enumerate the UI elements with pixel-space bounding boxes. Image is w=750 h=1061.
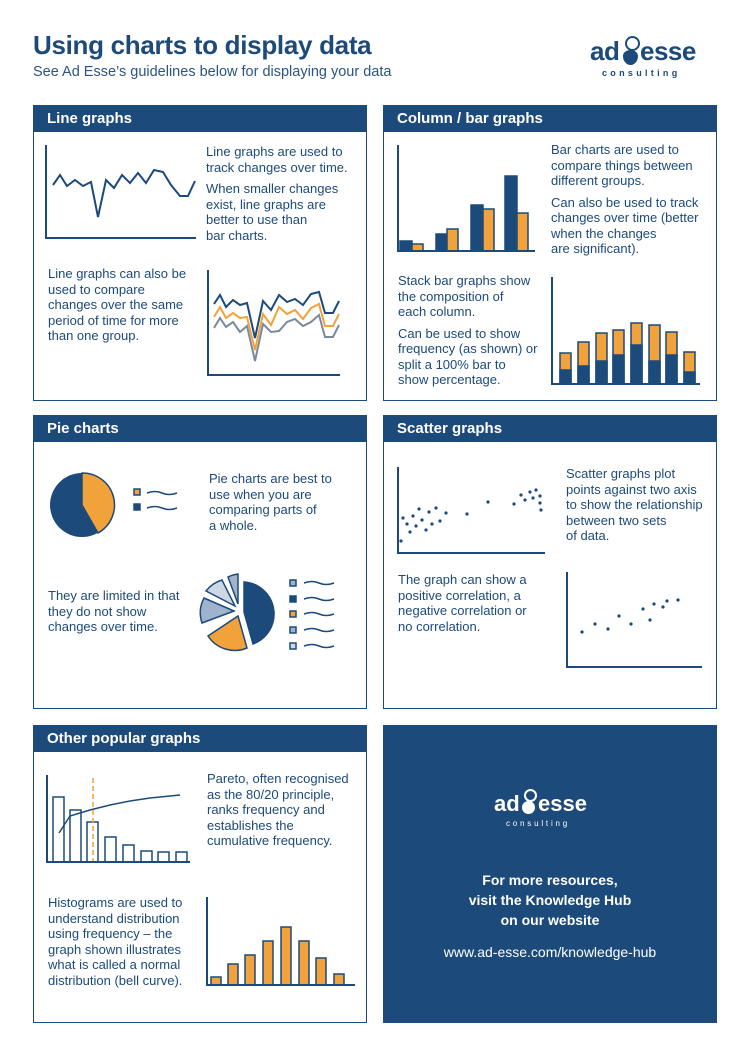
text: histogram: Histograms are used to [48, 895, 182, 910]
text: scatter 2: The graph can show a [398, 572, 527, 587]
logo: white: ad [494, 791, 520, 816]
text: histogram: using frequency – the [48, 926, 172, 941]
text: bar 2 [398, 273, 538, 387]
text: pie 1: use when you are [209, 486, 312, 502]
panel: resources [383, 725, 717, 1023]
panel: line graphs: Line graphs [47, 110, 132, 127]
logo: esse [640, 36, 696, 66]
text: line graphs 1: bar charts. [206, 228, 267, 242]
text: bar 2: Can be used to show [398, 326, 520, 340]
text: pie 2: they do not show [48, 604, 146, 618]
text: scatter 2: no correlation. [398, 618, 480, 634]
text: bar 1: are significant). [551, 241, 639, 256]
logo: ad [590, 36, 619, 66]
text: line graphs 2 [48, 266, 186, 343]
text: bar 1: when the changes [551, 226, 657, 240]
text: histogram: distribution (bell curve). [48, 972, 182, 988]
text: bar 1: different groups. [551, 173, 645, 188]
text: line graphs 2: period of time for more [48, 312, 179, 328]
logo: white: consulting [506, 819, 570, 828]
text: resources: on our website [501, 912, 599, 928]
logo [590, 36, 696, 78]
text: scatter 1: between two sets [566, 512, 666, 528]
panel: column bar graphs: Column / bar graphs [397, 110, 543, 127]
text: pie 2: changes over time. [48, 619, 158, 634]
panel: other popular graphs: Other popular graphs [47, 730, 200, 747]
text: scatter 2 [398, 572, 527, 634]
text: pie 2 [48, 588, 180, 634]
panel: other popular graphs [33, 725, 367, 1023]
text: pareto: ranks frequency and [207, 802, 325, 817]
logo: consulting [602, 68, 680, 78]
text: scatter 1: Scatter graphs plot [566, 466, 675, 481]
text: bar 2: Stack bar graphs show [398, 273, 530, 288]
text: pie 2: They are limited in that [48, 588, 180, 603]
text: bar 1: compare things between [551, 158, 693, 172]
text: scatter 1: to show the relationship [566, 497, 703, 512]
text: scatter 1: points against two axis [566, 482, 697, 496]
text: bar 1: Can also be used to track [551, 194, 698, 210]
text: bar 1 [551, 142, 698, 256]
panel: pie charts: Pie charts [47, 420, 119, 437]
panel: column bar graphs [383, 105, 717, 401]
text: bar 1: Bar charts are used to [551, 142, 679, 157]
logo: white [494, 789, 587, 828]
text: line graphs 1: better to use than [206, 212, 307, 227]
text: bar 2: frequency (as shown) or [398, 341, 537, 356]
text: line graphs 2: used to compare [48, 282, 145, 296]
text: line graphs 1: track changes over time. [206, 160, 348, 174]
text: pie 1: comparing parts of [209, 502, 317, 517]
panel: scatter graphs [383, 415, 717, 709]
text: line graphs 1: Line graphs are used to [206, 144, 343, 159]
subtitle: See Ad Esse’s guidelines below for displaying your data [33, 64, 391, 80]
text: line graphs 2: changes over the same [48, 297, 183, 312]
text: pareto [207, 771, 349, 848]
text: pie 1 [209, 471, 332, 532]
text: line graphs 1 [206, 144, 348, 242]
text: scatter 1: of data. [566, 528, 609, 543]
text: scatter 1 [566, 466, 703, 543]
text: bar 2: the composition of [398, 288, 504, 304]
text: pie 1: Pie charts are best to [209, 471, 332, 486]
text: histogram: understand distribution [48, 910, 180, 926]
panel: pie charts [33, 415, 367, 709]
text: bar 2: split a 100% bar to [398, 356, 506, 372]
text: scatter 2: negative correlation or [398, 603, 527, 618]
panel: line graphs [33, 105, 367, 401]
title: Using charts to display data [33, 30, 371, 60]
logo: white: esse [538, 791, 587, 816]
text: line graphs 1: exist, line graphs are [206, 196, 326, 212]
text: resources: For more resources, [482, 872, 618, 888]
text: bar 2: each column. [398, 304, 475, 319]
url: www.ad-esse.com/knowledge-hub [444, 944, 656, 960]
text: line graphs 1: When smaller changes [206, 181, 338, 196]
text: pareto: cumulative frequency. [207, 833, 332, 848]
text: histogram: graph shown illustrates [48, 942, 181, 956]
text: bar 2: show percentage. [398, 372, 501, 387]
text: line graphs 2: than one group. [48, 328, 139, 343]
text: pareto: Pareto, often recognised [207, 771, 349, 786]
text: pie 1: a whole. [209, 518, 257, 532]
text: pareto: as the 80/20 principle, [207, 786, 334, 802]
text: histogram [48, 895, 182, 988]
text: resources [468, 872, 631, 928]
text: histogram: what is called a normal [48, 957, 180, 972]
text: bar 1: changes over time (better [551, 210, 698, 225]
text: resources: visit the Knowledge Hub [469, 892, 631, 908]
text: scatter 2: positive correlation, a [398, 588, 521, 602]
panel: scatter graphs: Scatter graphs [397, 420, 502, 437]
text: pareto: establishes the [207, 818, 294, 832]
text: line graphs 2: Line graphs can also be [48, 266, 186, 281]
